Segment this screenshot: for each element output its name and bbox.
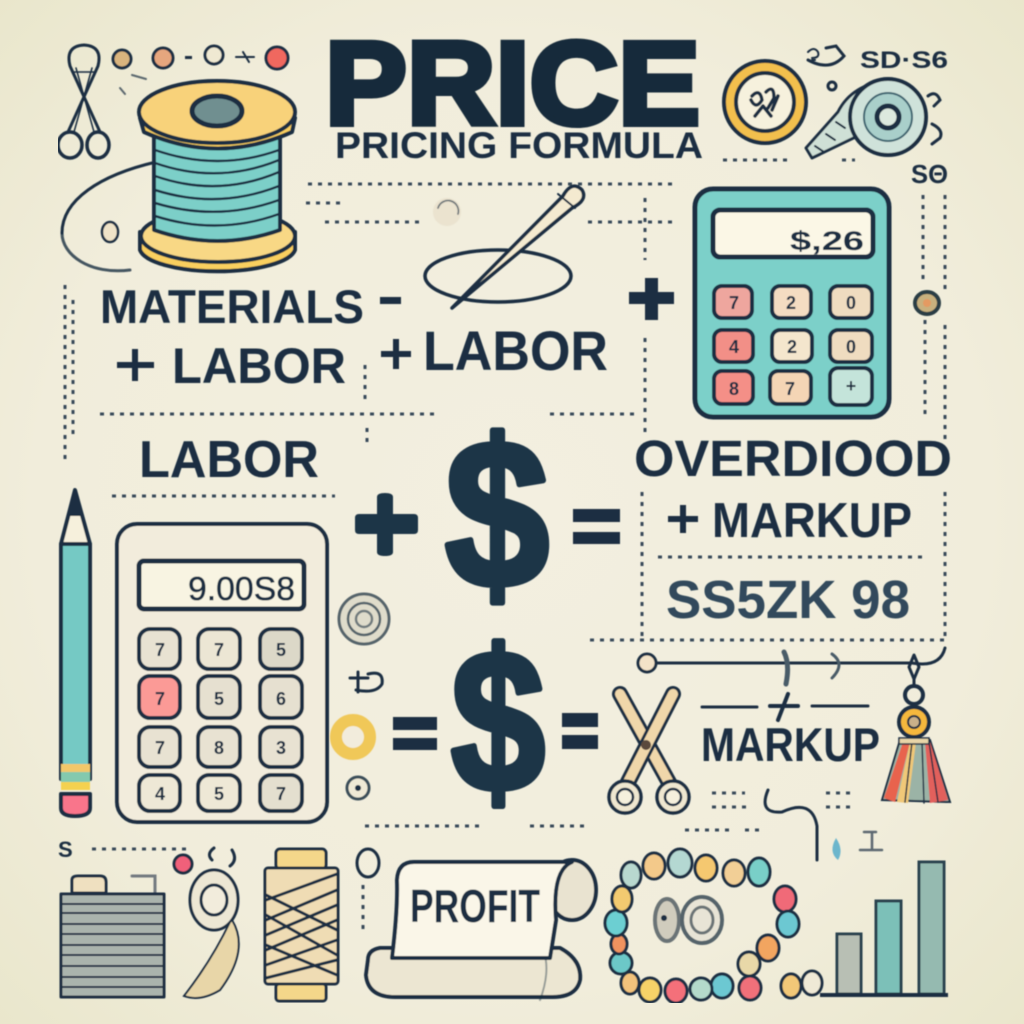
icon: yellow coin bbox=[724, 61, 806, 143]
teal calculator: 2 bbox=[787, 337, 797, 357]
large dollar sign top: $ bbox=[445, 397, 549, 632]
icon: tan scissors bbox=[609, 694, 689, 813]
large plus sign bbox=[355, 493, 418, 556]
icon: thread spool bbox=[62, 81, 295, 271]
text: labor: LABOR bbox=[139, 431, 319, 489]
small squiggle mark bbox=[350, 672, 382, 692]
outlined calculator: 7 bbox=[155, 689, 165, 709]
outlined calculator bbox=[117, 524, 327, 822]
teal calculator: 2 bbox=[786, 293, 796, 313]
large dollar sign bottom: $ bbox=[451, 608, 545, 834]
scattered marks top right: SΘ bbox=[911, 159, 948, 189]
thread line with beads bbox=[638, 648, 945, 684]
icon: spiral in necklace bbox=[655, 897, 722, 943]
small marks lower left: S bbox=[58, 837, 73, 862]
equals sign right bbox=[562, 713, 598, 749]
icon: small bead bbox=[347, 777, 369, 799]
teal calculator: 8 bbox=[729, 379, 739, 399]
outlined calculator: 7 bbox=[155, 640, 165, 660]
dotted connector lines bbox=[65, 160, 945, 830]
text: plus labor left: LABOR bbox=[172, 338, 346, 394]
dotted marks and hook, lower right bbox=[712, 790, 882, 860]
text: overhead: OVERDIOOD bbox=[634, 430, 952, 487]
scattered marks top right bbox=[808, 46, 948, 189]
outlined calculator: 7 bbox=[276, 784, 286, 804]
outlined calculator: 5 bbox=[214, 784, 224, 804]
equals sign top bbox=[573, 509, 620, 544]
teal calculator: + bbox=[846, 376, 856, 396]
text: garbled value: SS5ZK 98 bbox=[666, 570, 910, 630]
icon: needle and thread bbox=[425, 186, 584, 308]
outlined calculator: 3 bbox=[276, 738, 286, 758]
icon: tassel bbox=[882, 655, 950, 803]
teal calculator: 4 bbox=[729, 337, 739, 357]
plus sign bbox=[629, 278, 674, 320]
teal calculator: 0 bbox=[846, 293, 856, 313]
icon: profit scroll bbox=[366, 860, 596, 1000]
teal calculator: 0 bbox=[846, 337, 856, 357]
small marks lower left bbox=[58, 837, 379, 930]
divider with plus bbox=[702, 694, 868, 720]
equals sign middle bbox=[393, 717, 437, 750]
icon: scissors top left bbox=[58, 45, 109, 158]
icon: pencil bbox=[61, 490, 90, 816]
text: markup: MARKUP bbox=[701, 718, 880, 771]
icon: roll with ribbon bbox=[184, 870, 239, 998]
outlined calculator: 4 bbox=[155, 784, 165, 804]
text: materials: MATERIALS bbox=[100, 280, 364, 333]
title: PRICE bbox=[325, 18, 700, 150]
scattered marks top right: SD·S6 bbox=[860, 47, 948, 74]
icon: profit scroll: PROFIT bbox=[410, 880, 540, 932]
bar chart bbox=[820, 862, 948, 997]
teal calculator: 7 bbox=[729, 293, 739, 313]
outlined calculator: 7 bbox=[214, 640, 224, 660]
outlined calculator: 5 bbox=[276, 640, 286, 660]
minus sign bbox=[380, 297, 401, 304]
teal calculator bbox=[695, 189, 889, 417]
icon: target circle bbox=[339, 594, 389, 644]
small beads row bbox=[113, 46, 288, 94]
teal calculator: 7 bbox=[785, 379, 795, 399]
faint circle mark bbox=[433, 198, 461, 226]
bead on right dotted line bbox=[915, 292, 939, 314]
outlined calculator: 8 bbox=[214, 738, 224, 758]
teal calculator: $,26 bbox=[790, 226, 864, 256]
icon: twine spool bbox=[265, 849, 338, 1001]
icon: bead necklace bbox=[605, 849, 822, 1003]
text: plus labor middle: LABOR bbox=[423, 319, 608, 382]
outlined calculator: 6 bbox=[276, 689, 286, 709]
text: plus markup: MARKUP bbox=[712, 494, 912, 548]
outlined calculator: 7 bbox=[155, 738, 165, 758]
outlined calculator: 5 bbox=[214, 689, 224, 709]
icon: can of materials bbox=[61, 876, 164, 997]
icon: tape measure bbox=[806, 79, 926, 158]
outlined calculator: 9.00S8 bbox=[188, 570, 295, 607]
icon: yellow ring bbox=[336, 720, 370, 754]
subtitle: PRICING FORMULA bbox=[335, 125, 703, 166]
